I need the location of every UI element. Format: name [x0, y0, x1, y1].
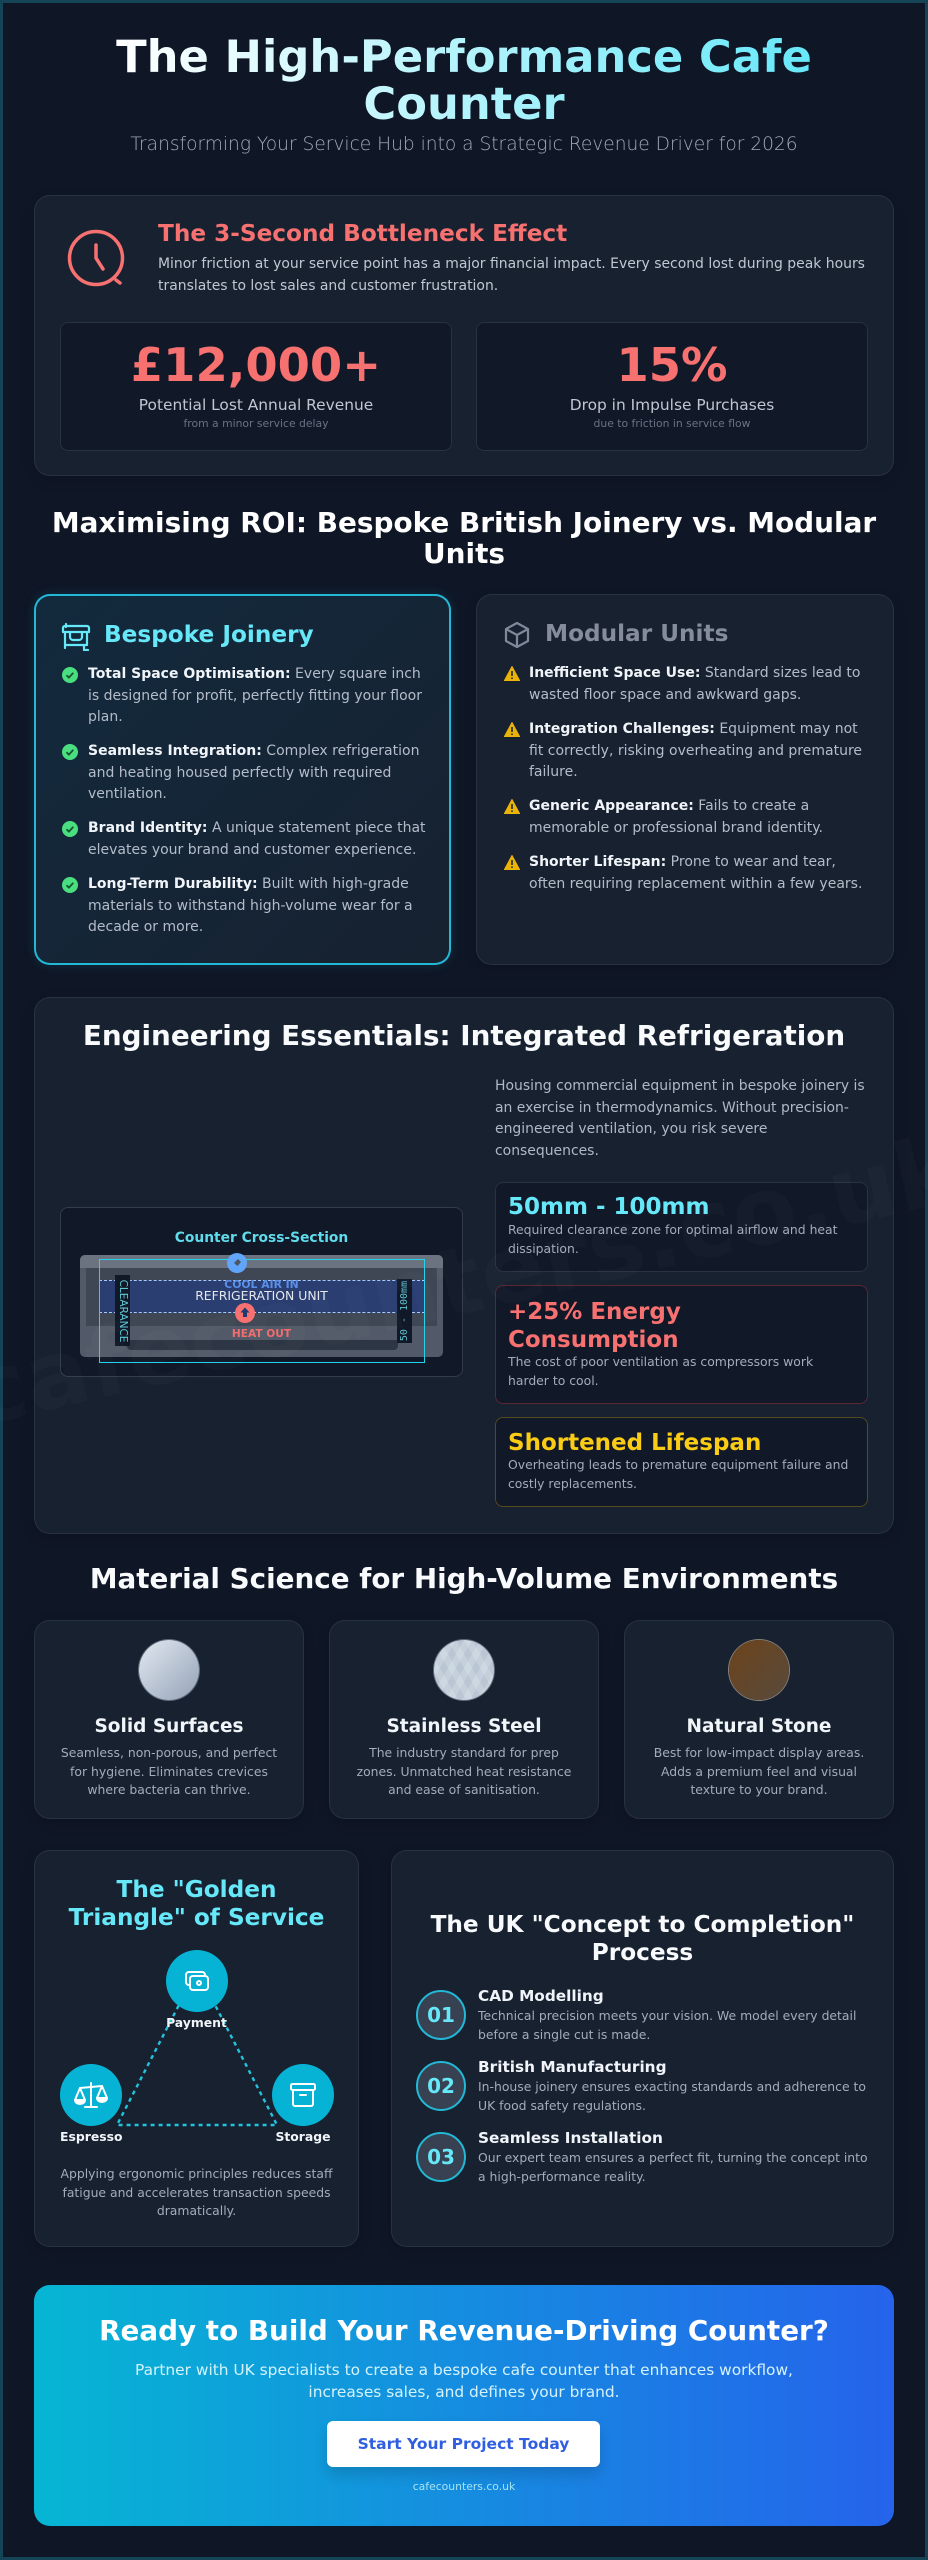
diagram title: Counter Cross-Section [175, 1230, 348, 1246]
plinth [127, 1340, 398, 1350]
text: bottleneck description [158, 256, 865, 294]
icon: counter [62, 622, 90, 651]
item: space optimisation [62, 666, 422, 725]
item: brand identity [62, 820, 426, 858]
item: integration challenges: fit correctly, risking overheating and premature [529, 743, 862, 759]
heading: process: Process [592, 1939, 693, 1966]
diagram: counter cross-section [60, 1207, 463, 1377]
heading: process [430, 1911, 854, 1966]
step 1 [416, 1987, 856, 2042]
material description: Best for low-impact display areas. [654, 1745, 864, 1760]
icon: payment [166, 1950, 228, 2012]
step description: Technical precision meets your vision. We model every detail [478, 2008, 856, 2023]
callout: shortened lifespan [495, 1417, 868, 1507]
item: seamless integration: ventilation. [88, 786, 167, 802]
node: storage [272, 2064, 334, 2144]
heading: golden triangle: The "Golden [117, 1876, 276, 1903]
item: seamless integration [62, 743, 419, 802]
callout: energy consumption: +25% Energy [508, 1299, 681, 1325]
text: call to action [135, 2361, 793, 2401]
material description: for hygiene. Eliminates crevices [70, 1764, 268, 1779]
item: integration challenges: failure. [529, 764, 578, 780]
step description: a high-performance reality. [478, 2169, 646, 2184]
material title: Stainless Steel [386, 1716, 542, 1737]
heading: bottleneck: The 3-Second Bottleneck Effect [158, 220, 567, 247]
step number: 03 [427, 2145, 455, 2169]
callout: energy consumption: harder to cool. [508, 1373, 599, 1388]
stat: impulse purchases: due to friction in service flow [594, 417, 750, 430]
text: triangle description: fatigue and accelerates transaction speeds [62, 2185, 331, 2200]
heading: modular: Modular Units [545, 620, 728, 647]
panel: bottleneck effect [34, 195, 894, 476]
icon: cube [504, 622, 530, 648]
label: cool air: COOL AIR IN [224, 1278, 299, 1291]
label: clearance size: 50 - 100mm [399, 1281, 410, 1341]
step 2 [416, 2058, 866, 2113]
panel: solid surfaces [34, 1620, 304, 1819]
text: engineering intro: an exercise in thermodynamics. Without precision- [495, 1100, 849, 1116]
material description [61, 1745, 277, 1797]
label: clearance: CLEARANCE [117, 1280, 129, 1342]
refrigeration unit [99, 1280, 425, 1313]
item: space optimisation: plan. [88, 709, 123, 725]
step description: UK food safety regulations. [478, 2098, 646, 2113]
material description: The industry standard for prep [369, 1745, 559, 1760]
stat: impulse purchases: 15% [616, 338, 728, 392]
button: Start Your Project Today [358, 2435, 569, 2453]
step title: British Manufacturing [478, 2058, 667, 2076]
clearance outline [99, 1259, 425, 1363]
step title: CAD Modelling [478, 1987, 604, 2005]
item: generic appearance [504, 798, 823, 836]
swatch: solid surface [139, 1640, 199, 1700]
step number: 02 [427, 2074, 455, 2098]
callout: energy consumption [495, 1285, 868, 1404]
counter body [80, 1255, 443, 1357]
item: brand identity: Brand Identity: A unique statement piece that [88, 820, 426, 836]
panel: golden triangle [34, 1850, 359, 2247]
subtitle: Transforming Your Service Hub into a Strategic Revenue Driver for 2026 [130, 134, 798, 155]
item: inefficient space: wasted floor space and awkward gaps. [529, 687, 801, 703]
material description: Seamless, non-porous, and perfect [61, 1745, 277, 1760]
label: heat out: HEAT OUT [232, 1328, 291, 1340]
heading: ROI: Maximising ROI: Bespoke British Joinery vs. Modular [52, 506, 876, 539]
heading: bespoke: Bespoke Joinery [104, 621, 314, 648]
step number: 01 [427, 2003, 455, 2027]
list: modular drawbacks [504, 665, 862, 892]
step description: In-house joinery ensures exacting standards and adherence to [478, 2079, 866, 2094]
title: Counter [363, 76, 565, 130]
icon: cool air [227, 1253, 247, 1273]
item: integration challenges: Integration Challenges: Equipment may not [529, 721, 858, 737]
text: call to action: Partner with UK specialists to create a bespoke cafe counter that enhances workflow, [135, 2361, 793, 2379]
panel: natural stone [624, 1620, 894, 1819]
step number [416, 1990, 466, 2040]
text: triangle description: Applying ergonomic principles reduces staff [60, 2166, 332, 2181]
icon: archive box [272, 2064, 334, 2126]
panel: engineering essentials [34, 997, 894, 1534]
text: triangle description: dramatically. [157, 2203, 236, 2218]
callout: energy consumption: Consumption [508, 1327, 679, 1353]
website: cafecounters.co.uk [413, 2480, 515, 2493]
swatch: steel [434, 1640, 494, 1700]
label: clearance size [397, 1279, 412, 1343]
stat: lost revenue: Potential Lost Annual Revenue [139, 396, 373, 414]
panel: call to action [34, 2285, 894, 2526]
material description: where bacteria can thrive. [87, 1782, 251, 1797]
text: engineering intro: engineered ventilation, you risk severe [495, 1121, 767, 1137]
item: durability: decade or more. [88, 919, 203, 935]
icon: scales [60, 2064, 122, 2126]
material title: Solid Surfaces [94, 1716, 244, 1737]
item: space optimisation: is designed for profit, perfectly fitting your floor [88, 688, 422, 704]
inner cavity [86, 1268, 437, 1326]
step 3 [416, 2129, 868, 2184]
heading: materials: Material Science for High-Volume Environments [90, 1562, 838, 1595]
title: The High-Performance Cafe [116, 30, 812, 83]
item: integration challenges [504, 721, 862, 780]
item: generic appearance: memorable or professional brand identity. [529, 820, 823, 836]
text: engineering intro [495, 1078, 865, 1159]
material description: and ease of sanitisation. [388, 1782, 540, 1797]
stat: lost revenue: £12,000+ [131, 338, 381, 392]
text: engineering intro: consequences. [495, 1143, 599, 1159]
callout: shortened lifespan: costly replacements. [508, 1476, 637, 1491]
label: espresso: Espresso [60, 2129, 122, 2144]
text: engineering intro: Housing commercial equipment in bespoke joinery is [495, 1078, 865, 1094]
text: call to action: increases sales, and defines your brand. [308, 2383, 620, 2401]
panel: process [391, 1850, 894, 2247]
stat: impulse purchases [476, 322, 868, 451]
material title: Natural Stone [687, 1716, 831, 1737]
text: bottleneck description: translates to lost sales and customer frustration. [158, 278, 498, 294]
item: generic appearance: Generic Appearance: Fails to create a [529, 798, 809, 814]
heading: ROI: Units [423, 537, 505, 570]
item: space optimisation: Total Space Optimisation: Every square inch [88, 666, 421, 682]
item: inefficient space: Inefficient Space Use: Standard sizes lead to [529, 665, 860, 681]
material description [357, 1745, 571, 1797]
material description: texture to your brand. [690, 1782, 828, 1797]
heading: call to action: Ready to Build Your Revenue-Driving Counter? [99, 2314, 829, 2347]
icon: clock [68, 230, 124, 286]
node: payment [166, 1950, 228, 2030]
material description [654, 1745, 864, 1797]
label: refrigeration unit: REFRIGERATION UNIT [195, 1288, 328, 1303]
label: payment: Payment [166, 2015, 227, 2030]
stat: lost revenue: from a minor service delay [183, 417, 329, 430]
step description [478, 2008, 856, 2042]
panel: bespoke joinery [34, 594, 451, 965]
callout: clearance zone: 50mm - 100mm [508, 1194, 709, 1220]
item: shorter lifespan [504, 854, 862, 892]
callout: shortened lifespan: Overheating leads to premature equipment failure and [508, 1457, 848, 1472]
step number [416, 2061, 466, 2111]
heading: golden triangle [68, 1876, 324, 1931]
title [116, 30, 812, 130]
item: shorter lifespan: Shorter Lifespan: Prone to wear and tear, [529, 854, 836, 870]
item: brand identity: elevates your brand and customer experience. [88, 842, 416, 858]
heading: engineering: Engineering Essentials: Integrated Refrigeration [83, 1019, 845, 1052]
heading: golden triangle: Triangle" of Service [69, 1904, 324, 1931]
item: seamless integration: and heating housed perfectly with required [88, 765, 391, 781]
list: bespoke benefits [62, 666, 426, 935]
button [327, 2421, 600, 2467]
swatch: stone [729, 1640, 789, 1700]
stat: impulse purchases: Drop in Impulse Purchases [570, 396, 774, 414]
step number [416, 2132, 466, 2182]
callout: clearance zone: dissipation. [508, 1241, 579, 1256]
panel: stainless steel [329, 1620, 599, 1819]
step title: Seamless Installation [478, 2129, 663, 2147]
item: durability [62, 876, 413, 935]
text: triangle description [60, 2166, 333, 2218]
callout: clearance zone [495, 1182, 868, 1272]
heading: process: The UK "Concept to Completion" [431, 1911, 854, 1938]
counter top [80, 1255, 443, 1268]
step description [478, 2079, 866, 2113]
item: shorter lifespan: often requiring replacement within a few years. [529, 876, 862, 892]
step description: Our expert team ensures a perfect fit, turning the concept into [478, 2150, 868, 2165]
callout: clearance zone: Required clearance zone for optimal airflow and heat [508, 1222, 838, 1237]
step description: before a single cut is made. [478, 2027, 650, 2042]
item: durability: materials to withstand high-volume wear for a [88, 898, 413, 914]
material description: Adds a premium feel and visual [661, 1764, 857, 1779]
icon: heat out [235, 1303, 255, 1323]
heading: ROI [52, 506, 876, 570]
callout: energy consumption: The cost of poor ventilation as compressors work [508, 1354, 813, 1369]
material description: zones. Unmatched heat resistance [357, 1764, 571, 1779]
node: espresso [60, 2064, 122, 2144]
callout: shortened lifespan: Shortened Lifespan [508, 1430, 761, 1456]
label: storage: Storage [275, 2129, 331, 2144]
text: bottleneck description: Minor friction at your service point has a major financial impact. Every second lost during peak hours [158, 256, 865, 272]
step description [478, 2150, 868, 2184]
stat: lost revenue [60, 322, 452, 451]
item: durability: Long-Term Durability: Built with high-grade [88, 876, 409, 892]
item: seamless integration: Seamless Integration: Complex refrigeration [88, 743, 419, 759]
item: inefficient space [504, 665, 860, 703]
panel: modular units [476, 594, 894, 965]
triangle lines [117, 2005, 278, 2126]
